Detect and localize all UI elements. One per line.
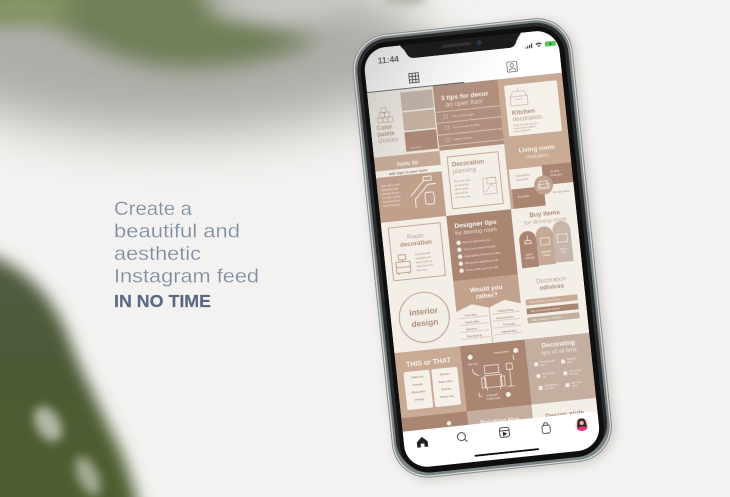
post: decoration planning: in a cozy way xyxy=(455,195,471,199)
headline text xyxy=(114,198,259,311)
post: 3 tips for decor: an open floor xyxy=(445,98,484,109)
post: how to: the room a warm xyxy=(382,195,401,200)
post: decoration advices: odivices xyxy=(539,283,565,292)
post: chair diagram xyxy=(460,339,531,411)
phone xyxy=(349,15,616,481)
post: decorating tips: walls xyxy=(567,362,573,364)
post: decorating tips: any room xyxy=(545,387,555,391)
headline text: Instagram feed xyxy=(114,266,259,288)
post: buy items: FIXTURE xyxy=(524,256,535,261)
post: buy items: LIGHT xyxy=(526,253,534,257)
post: living room mistakes: No clear xyxy=(550,169,560,173)
post: buy items: for dinning room xyxy=(524,216,567,227)
headline text: IN NO TIME xyxy=(114,291,211,311)
post: decorating tips: Add plants to xyxy=(544,383,559,388)
post: chair diagram: Hanging lamp xyxy=(494,350,509,355)
post: would you rather: Outdoor living xyxy=(497,307,514,313)
icon: search xyxy=(457,432,467,443)
post: row six xyxy=(401,404,584,432)
notch xyxy=(400,31,522,59)
phone body xyxy=(349,15,616,481)
post: this or that: Traditional xyxy=(410,374,424,380)
post: chair diagram: COMFORT xyxy=(486,393,499,398)
post: decoration advices xyxy=(526,276,580,324)
post: kitchen decoration: Organize and keep the xyxy=(513,122,539,127)
post: 3 tips for decor: Define spaces xyxy=(454,135,473,141)
icon: shop xyxy=(541,422,551,434)
post: row six: Painting tips xyxy=(480,416,520,427)
post: buy items: SET xyxy=(561,251,567,255)
post: decoration planning xyxy=(440,144,504,210)
post: chair diagram: FURNITURE xyxy=(487,397,501,401)
icon: reels xyxy=(499,427,510,438)
screen xyxy=(362,27,601,470)
post: decoration planning: so everything xyxy=(454,183,470,187)
icon: grid tab xyxy=(409,73,419,83)
post: how to xyxy=(374,151,446,223)
post: how to: Start with a small xyxy=(381,183,400,188)
status time: 11:44 xyxy=(377,54,400,66)
post: decoration planning: Plan your room xyxy=(454,179,471,184)
post: would you rather: Front Door xyxy=(465,312,477,318)
post: buy items xyxy=(514,206,574,268)
post: would you rather xyxy=(453,274,525,346)
post: this or that: THIS or THAT xyxy=(406,357,452,369)
home indicator xyxy=(474,448,539,457)
post: decorating tips: Paint the xyxy=(567,357,577,361)
post: living room mistakes: focal point xyxy=(551,173,562,177)
post: would you rather: Bedroom xyxy=(466,326,477,332)
post: decorating tips: tips of all time xyxy=(541,347,578,357)
post: decorating tips: Mix styles with xyxy=(540,359,556,364)
post: would you rather: Front yard xyxy=(503,321,515,327)
post: would you rather: Rare flooring xyxy=(467,333,483,338)
post: kitchen decoration: Kitchen xyxy=(512,108,535,117)
post: how to: add style to your home xyxy=(389,168,428,176)
post: room decoration: Room xyxy=(407,233,424,241)
post: 3 tips for decor: Let the walls breathe xyxy=(453,122,480,129)
post: designer tips: for dinning room xyxy=(455,227,497,237)
post: room decoration: feel cozy xyxy=(417,268,428,272)
instagram feed xyxy=(367,73,598,438)
post: this or that: Minimalism xyxy=(411,389,426,395)
blurred leaf shadows: bottom left xyxy=(0,248,142,497)
post: designer tips: Remember proportions of all xyxy=(465,258,499,265)
post: kitchen decoration: space tidy to make it xyxy=(513,125,537,130)
post: living room mistakes: Living room xyxy=(518,144,556,155)
post: interior design: interior xyxy=(409,305,439,318)
post: how to: that feels yours xyxy=(383,203,401,208)
post: room decoration: soft lights and xyxy=(415,256,432,260)
post: decorating tips: care xyxy=(540,363,546,367)
post: how to: how to xyxy=(397,159,419,168)
post: living room mistakes: mistakes xyxy=(526,152,549,161)
post: decoration planning: and it all fits xyxy=(455,191,469,195)
post: designer tips: Keep lighting fit above the table xyxy=(464,250,501,258)
post: living room mistakes xyxy=(504,137,576,210)
post: kitchen decoration: more functional xyxy=(514,129,531,133)
post: would you rather: Carpeted floor xyxy=(500,328,517,334)
post: buy items: PATIO xyxy=(560,248,567,251)
post: this or that: Eclectic xyxy=(441,386,452,391)
post: decorating tips xyxy=(525,333,596,405)
post: color palette xyxy=(376,89,438,152)
post: decorating tips: rug xyxy=(543,375,547,379)
post: 3 tips for decor: Use a wide angle xyxy=(452,112,475,118)
icon: home xyxy=(416,436,428,448)
post: room decoration: Decorate with xyxy=(415,252,431,256)
headline text: Create a xyxy=(114,198,192,220)
glass reflection xyxy=(364,46,476,178)
post: decoration advices: Stay with your color scheme xyxy=(531,307,561,313)
post: kitchen decoration xyxy=(497,73,569,145)
post: this or that: Brand new xyxy=(440,394,455,399)
post: color palette: choices xyxy=(378,137,399,145)
post: this or that: Vintage xyxy=(414,397,425,402)
post: room decoration: warm colors to xyxy=(416,260,433,264)
post: room decoration xyxy=(388,222,446,282)
post: would you rather: Would you xyxy=(470,284,503,294)
post: decoration advices: Make a statement with lights xyxy=(532,316,563,322)
blurred leaf shadows: top xyxy=(0,0,430,135)
post: designer tips xyxy=(446,209,518,281)
post: color palette: Color xyxy=(377,125,393,132)
post: decoration planning: planning xyxy=(452,166,477,176)
post: this or that: Neutrals xyxy=(412,382,424,387)
post: decorating tips: and airy xyxy=(569,372,579,376)
post: this or that xyxy=(394,346,467,418)
post: room decoration: decoration xyxy=(400,239,432,249)
post: living room mistakes: wrong sofa xyxy=(516,178,529,182)
post: how to: detail and build xyxy=(381,187,399,192)
post: decoration planning: Decoration xyxy=(452,158,485,169)
avatar xyxy=(575,418,588,432)
post: color palette: palete xyxy=(377,131,396,139)
post: room decoration: make the room xyxy=(416,264,433,268)
post: how to: and layered look xyxy=(382,199,402,204)
icon: tagged tab xyxy=(507,61,518,72)
headline text: aesthetic xyxy=(114,243,201,265)
post: living room mistakes: Choosing the xyxy=(515,173,531,178)
post: decorating tips: Decorating xyxy=(541,339,575,350)
post: this or that: Bold colors xyxy=(438,379,453,384)
post: how to: around it to give xyxy=(382,191,400,196)
post: designer tips: Designer tips xyxy=(454,219,497,230)
post: living room mistakes: Poor lights xyxy=(518,195,530,199)
post: chair diagram: Side wall xyxy=(468,362,478,367)
post: this or that: Modern xyxy=(440,371,450,376)
phone shadow xyxy=(352,17,619,483)
post: color palette: Soft wood xyxy=(410,146,421,150)
post: would you rather: rather? xyxy=(476,292,498,301)
post: buy items: DINNING xyxy=(541,250,551,254)
active tab underline xyxy=(367,82,464,93)
post: designer tips: Buy the right dining rug xyxy=(463,238,490,244)
post: decoration planning: has its place xyxy=(454,187,469,191)
post: interior design: design xyxy=(411,316,439,329)
post: would you rather: Home office xyxy=(465,319,480,325)
post: interior design xyxy=(398,292,450,344)
post: 3 tips for decor xyxy=(433,79,504,151)
post: buy items: Buy items xyxy=(529,209,561,219)
post: kitchen decoration: decoration xyxy=(512,113,543,124)
post: would you rather: Great bedroom xyxy=(496,315,514,320)
status icons xyxy=(525,41,556,49)
post: decorating tips: mirror xyxy=(572,384,578,388)
post: designer tips: Use a rug to frame the table xyxy=(464,244,497,251)
post: decorating tips: Use an area xyxy=(542,371,556,376)
post: buy items: TABLE xyxy=(543,254,551,258)
post: decorating tips: Keep it light xyxy=(569,369,582,373)
post: decoration advices: Decoration xyxy=(536,275,567,285)
post: row six: Design style xyxy=(545,409,585,420)
bottom navigation xyxy=(403,411,601,470)
post: decoration advices: Keep it simple for more room xyxy=(530,298,561,304)
post: living room mistakes: Too many items xyxy=(552,189,571,194)
post: decorating tips: Add a big xyxy=(571,381,582,385)
headline text: beautiful and xyxy=(114,220,240,242)
post: designer tips: Don't put the rug in the walk xyxy=(466,265,499,272)
post: 3 tips for decor: 3 tips for decor xyxy=(441,90,489,102)
